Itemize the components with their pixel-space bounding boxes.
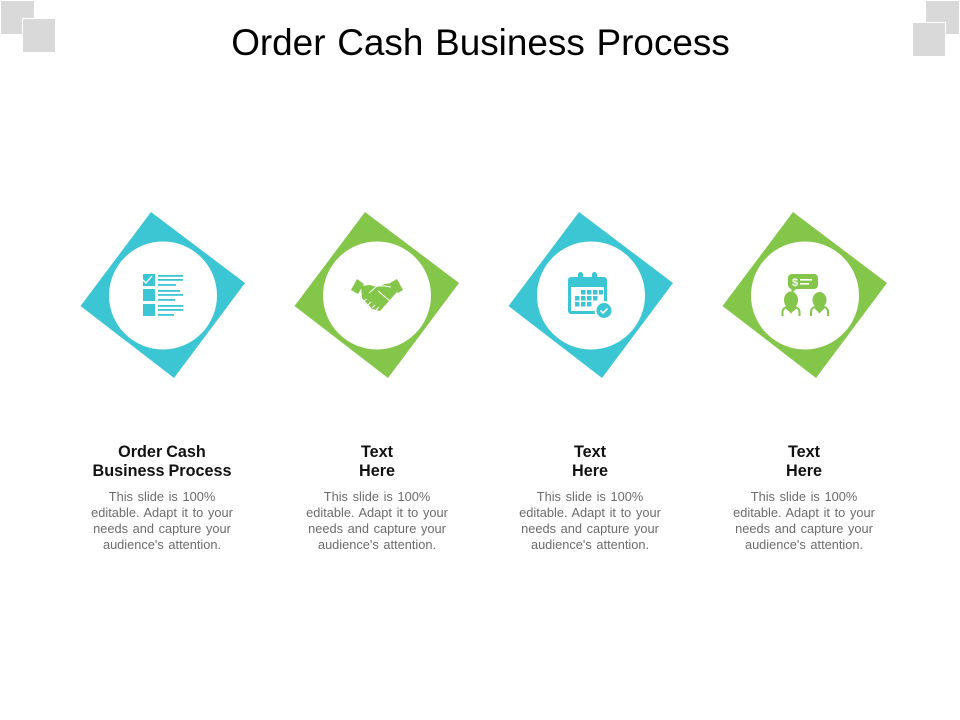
text block: Order Cash Business Process: audience's attention. [103,537,221,552]
text block: column 3 [519,443,661,552]
text block: column 3: editable. Adapt it to your [519,505,661,520]
text block: column 3: needs and capture your [521,521,659,536]
text block: column 2: This slide is 100% [324,489,430,504]
decoration: top-right squares [913,1,959,56]
icon: two people with speech bubble [782,274,828,316]
icon: checklist [142,274,183,316]
text block: Order Cash Business Process: needs and capture your [93,521,231,536]
text block: Order Cash Business Process [91,443,233,552]
text block: column 2: Here [359,462,395,480]
text block: column 4 [733,443,875,552]
panel: diamond with calendar icon [508,212,673,378]
text block: column 4: audience's attention. [745,537,863,552]
text block: column 4: Text [788,443,820,461]
text block: column 2: Text [361,443,393,461]
panel: diamond with checklist icon [80,212,245,378]
text block: column 2: editable. Adapt it to your [306,505,448,520]
icon: calendar [568,272,614,320]
icon: handshake [351,279,403,311]
text block: column 3: audience's attention. [531,537,649,552]
panel: diamond with handshake icon [294,212,459,378]
panel: diamond with people icon [722,212,887,378]
text block: Order Cash Business Process: editable. Adapt it to your [91,505,233,520]
icon: two people with speech bubble: $ [792,277,798,289]
text block: column 4: Here [786,462,822,480]
text block: column 3: Text [574,443,606,461]
title: Order Cash Business Process [231,22,730,63]
text block: column 2: needs and capture your [308,521,446,536]
text block: Order Cash Business Process: Business Process [93,462,231,480]
decoration: top-left squares [1,1,55,52]
text block: Order Cash Business Process: This slide is 100% [109,489,215,504]
text block: column 4: This slide is 100% [751,489,857,504]
text block: column 3: Here [572,462,608,480]
text block: Order Cash Business Process: Order Cash [118,443,206,461]
text block: column 2: audience's attention. [318,537,436,552]
text block: column 2 [306,443,448,552]
text block: column 4: needs and capture your [735,521,873,536]
text block: column 4: editable. Adapt it to your [733,505,875,520]
text block: column 3: This slide is 100% [537,489,643,504]
